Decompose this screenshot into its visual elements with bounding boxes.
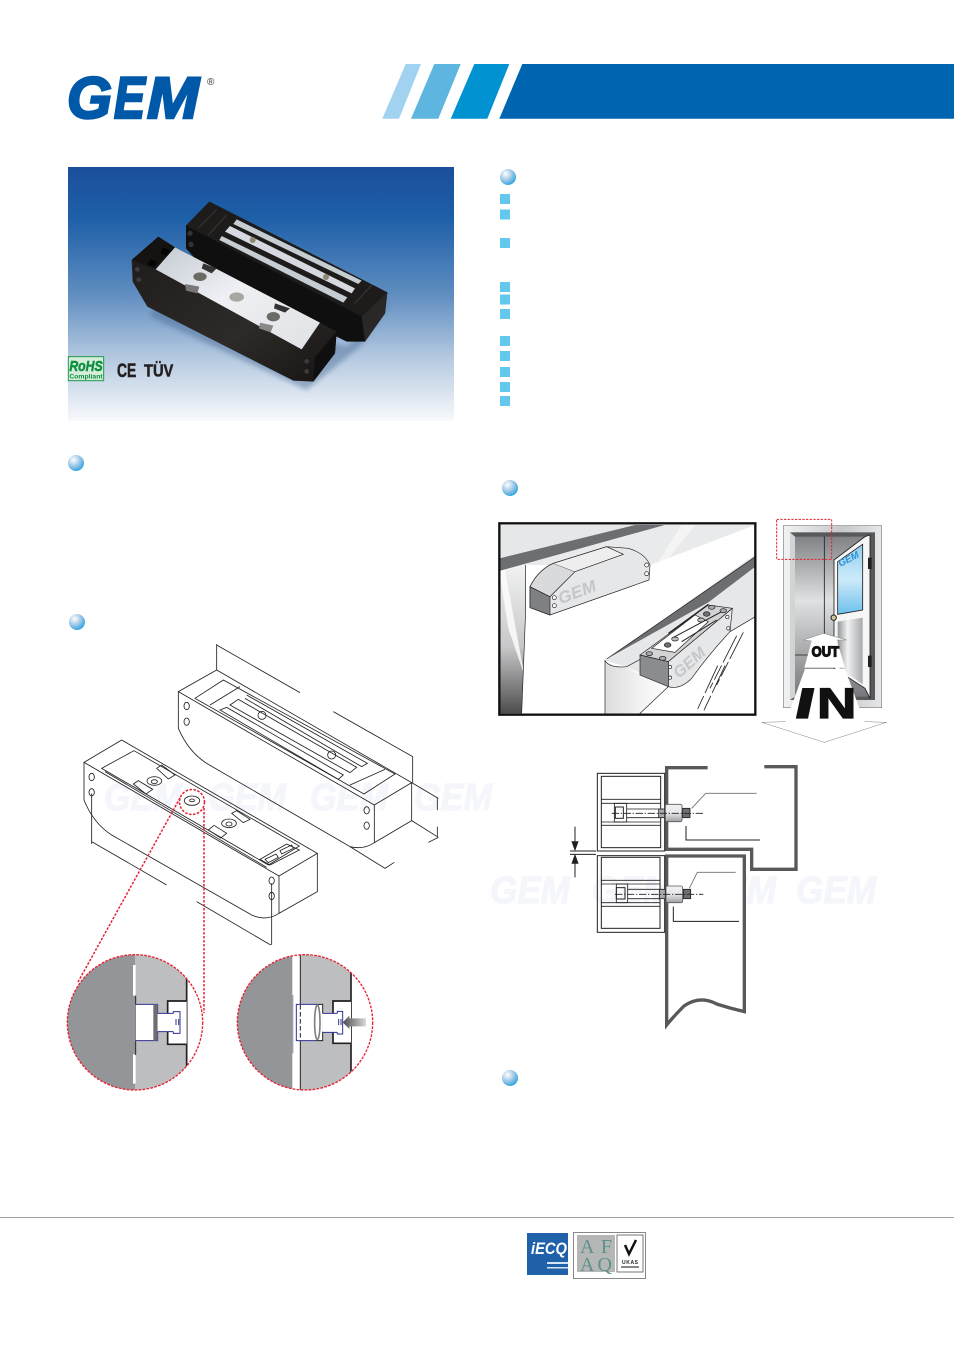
- isometric dimension drawing: [84, 644, 438, 945]
- GEM watermark right: GEM: [490, 870, 571, 912]
- GEM watermark left: GEM: [310, 777, 389, 819]
- certification logo: AFAQ UKAS: [574, 1232, 646, 1278]
- header banner with stripes: [382, 64, 954, 119]
- section ball: dimensions: [69, 614, 85, 630]
- GEM mark on armature: GEM: [670, 644, 710, 682]
- open door leaf: GEM: [837, 549, 862, 570]
- CE and TUV marks: [117, 360, 174, 382]
- open door leaf: [831, 535, 872, 698]
- magnet outline drawing: [178, 670, 412, 848]
- door jamb: [499, 565, 526, 713]
- armature front bar: [132, 237, 337, 382]
- GEM watermark left: [104, 777, 493, 819]
- IN arrow: [762, 669, 887, 742]
- certification logo: AFAQ UKAS: AQ: [580, 1254, 613, 1276]
- magnet back bar: [186, 202, 387, 342]
- installation closeup panel: [499, 523, 755, 715]
- certification logo: AFAQ UKAS: UKAS: [622, 1260, 639, 1266]
- features bullet squares: [500, 194, 510, 406]
- red zoom leader lines: [78, 790, 204, 1013]
- section ball: description: [68, 455, 84, 471]
- OUT arrow: OUT: [812, 644, 839, 661]
- door frame: [783, 526, 882, 708]
- armature dimension lines: [92, 793, 272, 945]
- glass door hatching: [698, 632, 743, 712]
- section ball: installation: [502, 480, 518, 496]
- door header: [499, 525, 755, 571]
- logo: GEM: [67, 66, 215, 131]
- section ball: features: [500, 169, 516, 185]
- certification logo: IECQ: [527, 1233, 568, 1275]
- gap dimension arrows: [570, 827, 596, 877]
- IN arrow: N: [817, 680, 856, 728]
- GEM watermark right: GEM: [796, 870, 877, 912]
- logo: GEM: ®: [207, 77, 215, 88]
- footer rule: [0, 1217, 954, 1218]
- CE and TUV marks: CE: [117, 361, 136, 382]
- top magnet: [530, 547, 650, 615]
- lower armature section: [597, 856, 703, 932]
- GEM mark on top magnet: GEM: [555, 576, 600, 608]
- GEM watermark right: GEM: [696, 870, 777, 912]
- lower armature: [640, 604, 732, 687]
- logo: GEM: M: [147, 66, 201, 131]
- OUT arrow: [803, 633, 847, 668]
- GEM watermark right: GEM: [592, 870, 673, 912]
- upper door frame section: [667, 767, 796, 869]
- photo shadow: [150, 293, 393, 390]
- RoHS badge: [68, 357, 104, 381]
- RoHS badge: Compliant: [69, 373, 104, 380]
- GEM watermark left: GEM: [104, 777, 183, 819]
- GEM watermark left: GEM: [208, 777, 287, 819]
- product photo panel: [68, 167, 454, 421]
- GEM watermark right: [490, 870, 877, 912]
- RoHS badge: RoHS: [69, 359, 103, 375]
- detail circle: locked position: [66, 954, 204, 1091]
- certification logo: IECQ: iECQ: [531, 1239, 567, 1258]
- door gap section drawing: [570, 767, 796, 1025]
- detail circle: released position: [236, 954, 374, 1091]
- magnet dimension lines: [217, 644, 438, 868]
- red location box: [777, 519, 832, 559]
- door illustration: [762, 519, 887, 742]
- IN arrow: I: [790, 680, 820, 728]
- door leaf: [605, 554, 755, 715]
- lower door section: [667, 856, 744, 1025]
- GEM watermark left: GEM: [414, 777, 493, 819]
- CE and TUV marks: TÜV: [144, 360, 174, 380]
- section ball: ordering: [502, 1070, 518, 1086]
- logo: GEM: E: [114, 66, 147, 131]
- armature outline drawing: [84, 740, 317, 918]
- certification logo: AFAQ UKAS: AF: [580, 1236, 612, 1258]
- logo: GEM: G: [67, 66, 112, 131]
- leader lines: [689, 793, 757, 888]
- upper magnet section: [597, 773, 704, 851]
